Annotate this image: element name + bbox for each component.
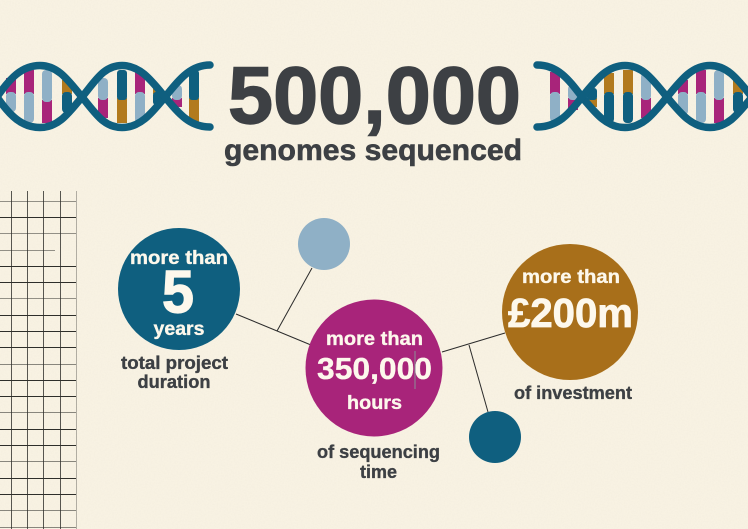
stat: 5 years: years — [154, 319, 204, 340]
stat: 350,000 hours: hours — [347, 393, 402, 414]
caption: of sequencing time: of sequencing — [317, 442, 440, 462]
caption: total project duration: total project — [121, 353, 228, 373]
stat: 350,000 hours — [306, 300, 442, 436]
caption: of sequencing time: time — [360, 462, 397, 482]
stat: 5 years — [118, 228, 240, 350]
caption: total project duration — [121, 353, 228, 392]
stat: 200m investment — [502, 244, 638, 380]
stat: 5 years: 5 — [162, 258, 194, 326]
grid pattern — [0, 191, 76, 529]
stat: 200m investment: more than — [522, 266, 620, 288]
title: 500,000 — [228, 51, 521, 141]
stat: 350,000 hours: more than — [326, 328, 423, 350]
stat: 5 years: more than — [130, 247, 228, 269]
stat: 350,000 hours: 350,000 — [317, 351, 432, 386]
icon: right DNA helix — [537, 65, 748, 128]
caption: total project duration: duration — [138, 372, 210, 392]
stat: 200m investment: £200m — [508, 290, 633, 336]
connector lines — [236, 268, 505, 412]
circle: dark blue node — [469, 411, 521, 463]
caption: of investment: of investment — [514, 383, 632, 403]
caption: of sequencing time — [317, 442, 440, 482]
circle: light blue node — [298, 218, 350, 270]
subtitle: genomes sequenced — [224, 134, 522, 167]
icon: left DNA helix — [0, 65, 210, 128]
